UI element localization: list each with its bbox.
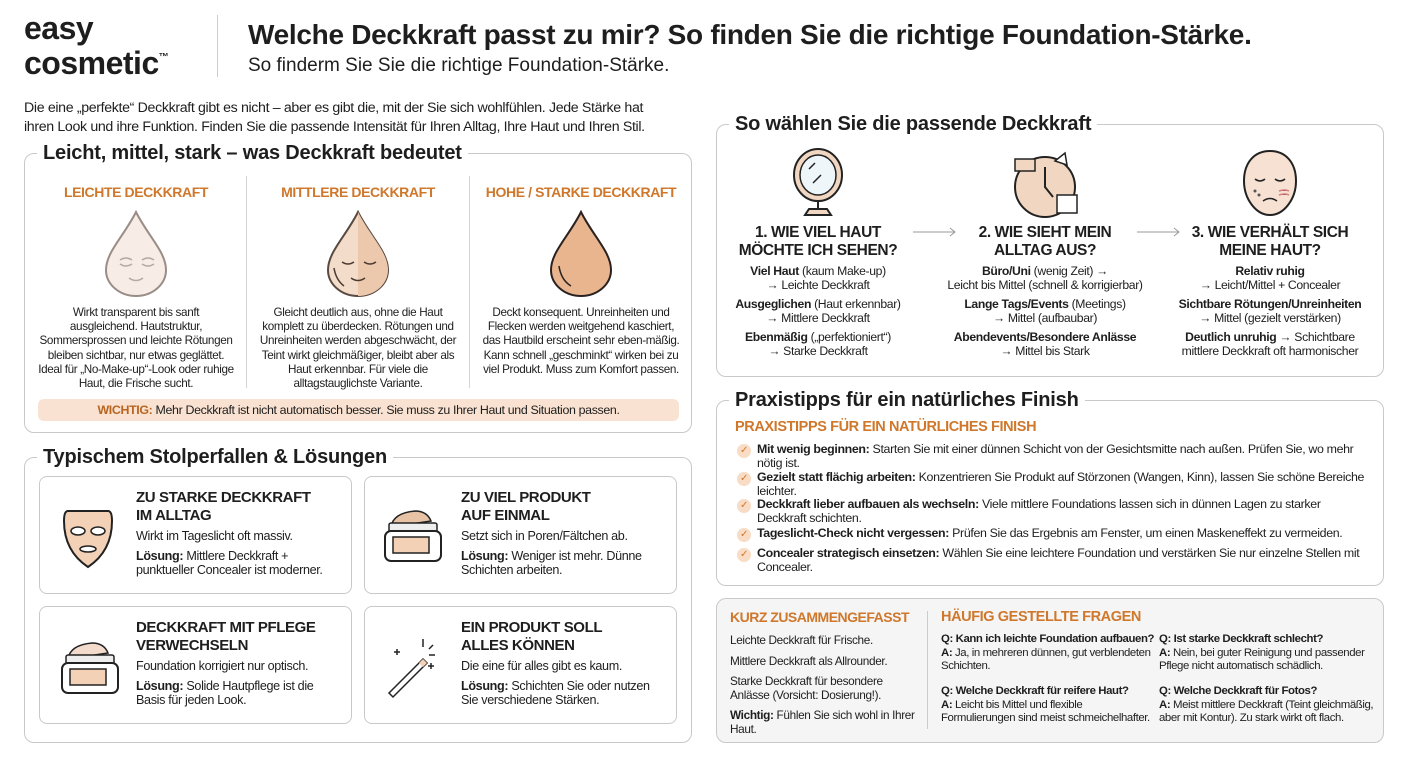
- tip 2: ✓: [740, 473, 748, 484]
- faq 4: A: Meist mittlere Deckkraft (Teint gleichmäßig, aber mit Kontur). Zu stark wirkt oft flach.: [1159, 698, 1373, 724]
- step 2: [947, 152, 1143, 358]
- step 1: → Mittlere Deckkraft: [766, 311, 870, 325]
- step 2: → Mittel (aufbaubar): [993, 311, 1097, 325]
- step 3: → Mittel (gezielt verstärken): [1199, 311, 1341, 325]
- faq 3: A: Leicht bis Mittel und flexible Formulierungen sind meist schmeichelhafter.: [941, 698, 1150, 724]
- FAQ heading: HÄUFIG GESTELLTE FRAGEN: [941, 609, 1141, 625]
- card: zu starke Deckkraft: Lösung: Mittlere Deckkraft + punktueller Concealer ist moderner.: [136, 549, 323, 577]
- logo: cosmetic™: [24, 45, 168, 81]
- step 2: Leicht bis Mittel (schnell & korrigierbar): [947, 278, 1143, 292]
- column: mittel: Gleicht deutlich aus, ohne die Haut komplett zu überdecken. Rötungen und Unreinheiten werden abgeschwächt, der Teint wirkt gleichmäßiger, bleibt aber als Haut erkennbar. Für viele die alltagstauglichste Variante.: [260, 306, 456, 390]
- column: leicht: Wirkt transparent bis sanft ausgleichend. Hautstruktur, Sommersprossen und leichte Rötungen bleiben sichtbar, nur etwas geglättet. Ideal für „No-Make-up“-Look oder ruhige Haut, die Frische sucht.: [38, 306, 234, 390]
- card: zu viel Produkt: Setzt sich in Poren/Fältchen ab.: [461, 529, 628, 543]
- step 1: → Leichte Deckkraft: [766, 278, 870, 292]
- column: stark: [483, 184, 679, 376]
- panel: Praxistipps: [716, 400, 1384, 586]
- icon: clock calendar: [1014, 152, 1078, 218]
- faq 1: [941, 633, 1154, 672]
- tip 3: ✓: [740, 500, 748, 511]
- step 3: → Leicht/Mittel + Concealer: [1200, 278, 1340, 292]
- column: mittel: MITTLERE DECKKRAFT: [281, 184, 435, 200]
- step 1: [735, 148, 901, 358]
- faq 2: A: Nein, bei guter Reinigung und passender Pflege nicht automatisch schädlich.: [1159, 646, 1364, 672]
- step 3: Deutlich unruhig → Schichtbare: [1185, 330, 1355, 344]
- tip 2: Gezielt statt flächig arbeiten: Konzentrieren Sie Produkt auf Störzonen (Wangen, Kinn), lassen Sie schöne Bereiche leichter.: [757, 470, 1364, 498]
- column: stark: HOHE / STARKE DECKKRAFT: [486, 184, 676, 200]
- icon: wand: [388, 639, 435, 698]
- column: leicht: LEICHTE DECKKRAFT: [64, 184, 208, 200]
- tip 1: ✓: [740, 445, 748, 456]
- summary: Leichte Deckkraft für Frische. Mittlere Deckkraft als Allrounder. Starke Deckkraft für besondere Anlässe (Vorsicht: Dosierung!). Wichtig: Fühlen Sie sich wohl in Ihrer Haut.: [730, 633, 915, 736]
- card: Pflege: Foundation korrigiert nur optisch.: [136, 659, 308, 673]
- panel: Stolperfallen: [24, 457, 692, 743]
- card: Pflege: DECKKRAFT MIT PFLEGE: [136, 619, 316, 636]
- step 1: Viel Haut (kaum Make-up): [750, 264, 886, 278]
- step 3: [1179, 150, 1361, 358]
- heading: Praxistipps für ein natürliches Finish: [735, 389, 1079, 411]
- icon: mask: [63, 510, 113, 568]
- panel: Zusammenfassung & FAQ: [716, 598, 1384, 743]
- faq 4: [1159, 685, 1373, 724]
- column: mittel: [260, 184, 456, 390]
- tip 5: ✓: [740, 549, 748, 560]
- step 2: Lange Tags/Events (Meetings): [964, 297, 1126, 311]
- faq 1: Q: Kann ich leichte Foundation aufbauen?: [941, 633, 1154, 645]
- card: zu starke Deckkraft: IM ALLTAG: [136, 507, 211, 524]
- card: zu viel Produkt: ZU VIEL PRODUKT: [461, 489, 591, 506]
- card: ein Produkt: Die eine für alles gibt es kaum.: [461, 659, 622, 673]
- card: zu viel Produkt: AUF EINMAL: [461, 507, 550, 524]
- faq 4: Q: Welche Deckkraft für Fotos?: [1159, 685, 1317, 697]
- card: ein Produkt: Lösung: Schichten Sie oder nutzen Sie verschiedene Stärken.: [461, 679, 650, 707]
- column: leicht: [38, 184, 234, 390]
- tip 5: Concealer strategisch einsetzen: Wählen Sie eine leichtere Foundation und verstärken Sie nur einzelne Stellen mit Concealer.: [757, 546, 1359, 574]
- step 3: mittlere Deckkraft oft harmonischer: [1182, 344, 1358, 358]
- tip 4: Tageslicht-Check nicht vergessen: Prüfen Sie das Ergebnis am Fenster, um einen Maskeneffekt zu vermeiden.: [757, 526, 1342, 540]
- step 2: 2. WIE SIEHT MEIN: [979, 224, 1111, 241]
- tip 3: Deckkraft lieber aufbauen als wechseln: Viele mittlere Foundations lassen sich in dünnen Lagen zu starker Deckkraft schichten.: [757, 497, 1321, 524]
- faq 3: Q: Welche Deckkraft für reifere Haut?: [941, 685, 1129, 697]
- card: zu starke Deckkraft: ZU STARKE DECKKRAFT: [136, 489, 311, 506]
- icon: face: [1243, 150, 1297, 216]
- step 3: MEINE HAUT?: [1219, 242, 1321, 258]
- card: zu starke Deckkraft: Wirkt im Tageslicht oft massiv.: [136, 529, 293, 543]
- faq 1: A: Ja, in mehreren dünnen, gut verblendeten Schichten.: [941, 646, 1151, 672]
- step 1: MÖCHTE ICH SEHEN?: [739, 242, 897, 258]
- step 1: 1. WIE VIEL HAUT: [755, 224, 881, 241]
- logo: easy: [24, 10, 93, 46]
- step 2: ALLTAG AUS?: [994, 242, 1096, 258]
- arrow: [1137, 228, 1180, 236]
- step 2: Büro/Uni (wenig Zeit) →: [982, 264, 1108, 278]
- heading: So wählen Sie die passende Deckkraft: [735, 113, 1091, 135]
- card: zu starke Deckkraft: [39, 476, 352, 594]
- heading: Typischem Stolperfallen & Lösungen: [43, 446, 387, 468]
- panel: Auswahl: [716, 124, 1384, 377]
- intro text: Die eine „perfekte“ Deckkraft gibt es nicht – aber es gibt die, mit der Sie sich wohlfühlen. Jede Stärke hat ihren Look und ihre Funktion. Finden Sie die passende Intensität für Ihren Alltag, Ihre Haut und Ihren Stil.: [24, 100, 645, 134]
- summary: KURZ ZUSAMMENGEFASST: [730, 609, 909, 625]
- step 3: Relativ ruhig: [1235, 264, 1305, 278]
- logo: [24, 10, 168, 81]
- faq 2: [1159, 633, 1365, 672]
- card: zu viel Produkt: [364, 476, 677, 594]
- step 1: Ausgeglichen (Haut erkennbar): [735, 297, 901, 311]
- title: Welche Deckkraft passt zu mir? So finden Sie die richtige Foundation-Stärke.: [248, 19, 1252, 50]
- step 3: 3. WIE VERHÄLT SICH: [1192, 224, 1348, 241]
- card: ein Produkt: [364, 606, 677, 724]
- tip 1: Mit wenig beginnen: Starten Sie mit einer dünnen Schicht von der Gesichtsmitte nach außen. Prüfen Sie, wo mehr nötig ist.: [757, 442, 1353, 470]
- step 1: Ebenmäßig („perfektioniert“): [745, 330, 891, 344]
- callout: wichtig: [38, 399, 679, 421]
- card: Pflege: VERWECHSELN: [136, 637, 248, 654]
- arrow: [913, 228, 956, 236]
- panel: Deckkraft levels: [24, 153, 692, 433]
- tip 4: ✓: [740, 529, 748, 540]
- subheading: PRAXISTIPPS FÜR EIN NATÜRLICHES FINISH: [735, 419, 1036, 435]
- callout: wichtig: WICHTIG: Mehr Deckkraft ist nicht automatisch besser. Sie muss zu Ihrer Haut und Situation passen.: [97, 403, 620, 417]
- faq 2: Q: Ist starke Deckkraft schlecht?: [1159, 633, 1323, 645]
- card: Pflege: [39, 606, 352, 724]
- card: ein Produkt: EIN PRODUKT SOLL: [461, 619, 602, 636]
- card: Pflege: Lösung: Solide Hautpflege ist die Basis für jeden Look.: [136, 679, 313, 707]
- step 2: Abendevents/Besondere Anlässe: [954, 330, 1136, 344]
- step 3: Sichtbare Rötungen/Unreinheiten: [1179, 297, 1361, 311]
- step 1: → Starke Deckkraft: [768, 344, 868, 358]
- step 2: → Mittel bis Stark: [1000, 344, 1090, 358]
- heading: Leicht, mittel, stark – was Deckkraft bedeutet: [43, 142, 462, 164]
- column: stark: Deckt konsequent. Unreinheiten und Flecken werden weitgehend kaschiert, das Hautbild erscheint sehr eben-mäßig. Kann schnell „geschminkt“ wirken bei zu viel Produkt. Muss zum Komfort passen.: [483, 306, 679, 376]
- faq 3: [941, 685, 1150, 724]
- icon: mirror: [793, 148, 843, 216]
- card: ein Produkt: ALLES KÖNNEN: [461, 637, 575, 654]
- icon: jar: [384, 510, 442, 562]
- card: zu viel Produkt: Lösung: Weniger ist mehr. Dünne Schichten arbeiten.: [461, 549, 642, 577]
- subtitle: So finderm Sie Sie die richtige Foundation-Stärke.: [248, 55, 669, 76]
- icon: cream jar: [61, 642, 119, 694]
